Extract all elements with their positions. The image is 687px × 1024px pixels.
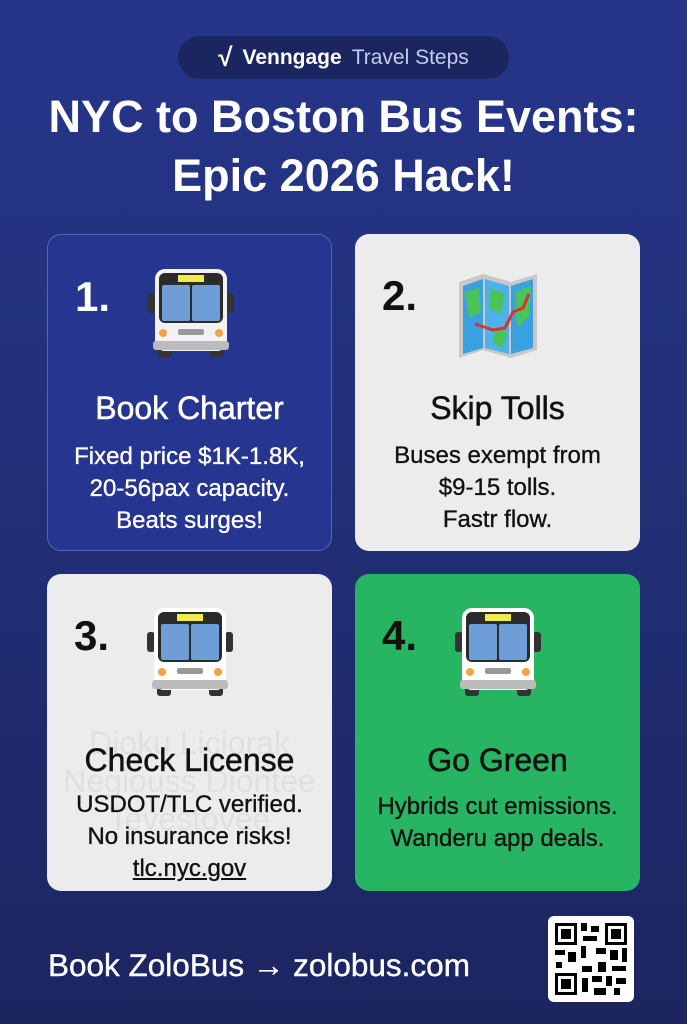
body text: tlc.nyc.gov [133, 855, 246, 882]
body text: USDOT/TLC verified. [76, 791, 303, 818]
header pill: Venngage [242, 46, 342, 68]
number 3: 3. [74, 612, 109, 659]
body text [76, 791, 303, 882]
body text: No insurance risks! [87, 823, 292, 850]
body text: Hybrids cut emissions. [377, 793, 618, 820]
number 4: 4. [382, 612, 417, 659]
body text [74, 443, 305, 534]
qr code [548, 916, 634, 1002]
header pill: √ [218, 42, 232, 72]
heading: Check License [85, 742, 294, 778]
header pill [178, 36, 509, 79]
title: Epic 2026 Hack! [172, 150, 515, 201]
heading: Skip Tolls [430, 390, 565, 426]
body text [377, 793, 618, 852]
title [48, 91, 639, 201]
heading: Go Green [427, 742, 568, 778]
faint background text: Dioku Liciorak [89, 725, 290, 761]
icon: bus [148, 269, 234, 357]
body text: 20-56pax capacity. [90, 475, 289, 502]
body text: Fixed price $1K-1.8K, [74, 443, 305, 470]
number 1: 1. [75, 273, 110, 320]
panel: check license [47, 574, 332, 891]
body text: $9-15 tolls. [439, 474, 556, 501]
body text: Buses exempt from [394, 442, 601, 469]
faint background text [63, 725, 316, 837]
body text: Wanderu app deals. [391, 825, 604, 852]
footer cta: Book ZoloBus → zolobus.com [48, 947, 470, 983]
icon: bus [455, 608, 541, 696]
faint background text: Negiouss Diontee [63, 763, 316, 799]
body text [394, 442, 601, 533]
body text: Fastr flow. [443, 506, 552, 533]
icon: bus [147, 608, 233, 696]
faint background text: Tevestovee [109, 801, 270, 837]
panel: go green [355, 574, 640, 891]
header pill: Travel Steps [352, 46, 469, 68]
title: NYC to Boston Bus Events: [48, 91, 639, 142]
panel: skip tolls [355, 234, 640, 551]
body text: Beats surges! [116, 507, 263, 534]
icon: map [459, 274, 537, 358]
number 2: 2. [382, 272, 417, 319]
panel: book charter [47, 234, 332, 551]
heading: Book Charter [95, 390, 284, 426]
